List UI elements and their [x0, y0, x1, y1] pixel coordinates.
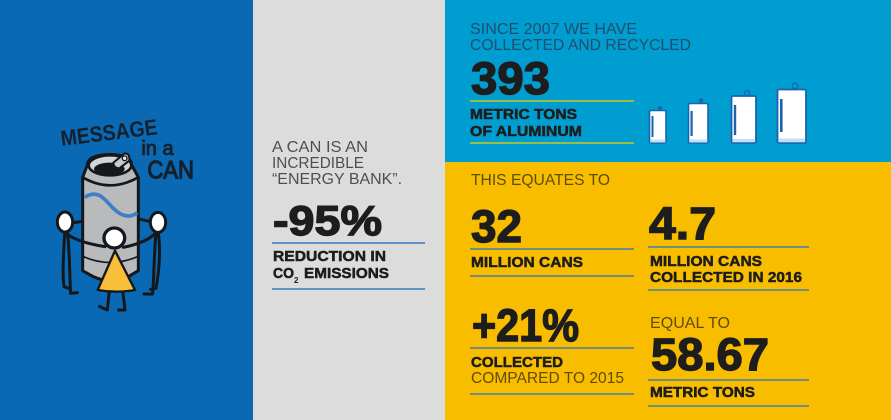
- text block: intro: A CAN IS AN: [272, 139, 368, 156]
- stat: +21% collected compared to 2015: COMPARED TO 2015: [471, 370, 624, 387]
- label: reduction in CO2 emissions: 2: [294, 276, 299, 285]
- text block: since 2007: SINCE 2007 WE HAVE: [470, 21, 637, 38]
- panel: blue recycled aluminum: [445, 0, 891, 162]
- text block: since 2007: [470, 21, 691, 54]
- stat: 4.7 million cans collected in 2016: [648, 198, 809, 291]
- panel: yellow equivalents: [445, 162, 891, 420]
- label: reduction in CO2 emissions: EMISSIONS: [304, 266, 389, 282]
- figure: right person: [123, 212, 166, 294]
- stat: equal to 58.67 metric tons: 58.67: [651, 329, 769, 380]
- icon: can 2: [688, 98, 708, 143]
- icon: can 4: [778, 83, 806, 143]
- illustration: people around a can: [57, 114, 194, 310]
- stat: 4.7 million cans collected in 2016: MILLION CANS: [650, 254, 762, 270]
- stat: equal to 58.67 metric tons: [648, 315, 809, 407]
- figure: left person: [57, 212, 105, 293]
- logo text: MESSAGE: MESSAGE: [59, 114, 159, 151]
- stat: equal to 58.67 metric tons: METRIC TONS: [650, 385, 755, 401]
- text block: since 2007: COLLECTED AND RECYCLED: [470, 37, 691, 54]
- stat: +21% collected compared to 2015: COLLECTED: [471, 355, 563, 371]
- heading: this equates to: THIS EQUATES TO: [471, 172, 610, 189]
- icon: aluminum can: [83, 153, 138, 281]
- logo text: CAN: CAN: [147, 158, 194, 185]
- label: reduction in CO2 emissions: [273, 249, 389, 285]
- text block: intro: [272, 139, 402, 188]
- label: metric tons of aluminum: [470, 107, 582, 140]
- stat: 393: 393: [471, 53, 550, 104]
- icon: can 3: [732, 90, 756, 143]
- text block: intro: “ENERGY BANK”.: [272, 171, 402, 188]
- stat: +21% collected compared to 2015: [470, 300, 634, 395]
- text block: intro: INCREDIBLE: [272, 155, 364, 172]
- stat: +21% collected compared to 2015: +21%: [472, 300, 579, 351]
- stat: 32 million cans: [470, 201, 634, 277]
- figure: center person in yellow: [98, 228, 135, 310]
- icon: can chart growing sizes: [650, 83, 806, 143]
- logo text: in a: in a: [141, 138, 175, 160]
- stat: equal to 58.67 metric tons: EQUAL TO: [650, 315, 730, 332]
- icon: can 1: [650, 106, 666, 143]
- stat: 32 million cans: 32: [471, 201, 522, 252]
- label: reduction in CO2 emissions: REDUCTION IN: [273, 249, 386, 265]
- stat: 4.7 million cans collected in 2016: COLLECTED IN 2016: [650, 270, 802, 286]
- label: reduction in CO2 emissions: CO: [273, 266, 294, 282]
- label: metric tons of aluminum: OF ALUMINUM: [470, 124, 582, 140]
- stat: 32 million cans: MILLION CANS: [471, 255, 583, 271]
- panel: blue illustration panel: [0, 0, 253, 420]
- stat: -95%: -95%: [273, 197, 382, 244]
- panel: grey energy bank: [253, 0, 445, 420]
- label: metric tons of aluminum: METRIC TONS: [470, 107, 577, 123]
- stat: 4.7 million cans collected in 2016: 4.7: [649, 198, 716, 249]
